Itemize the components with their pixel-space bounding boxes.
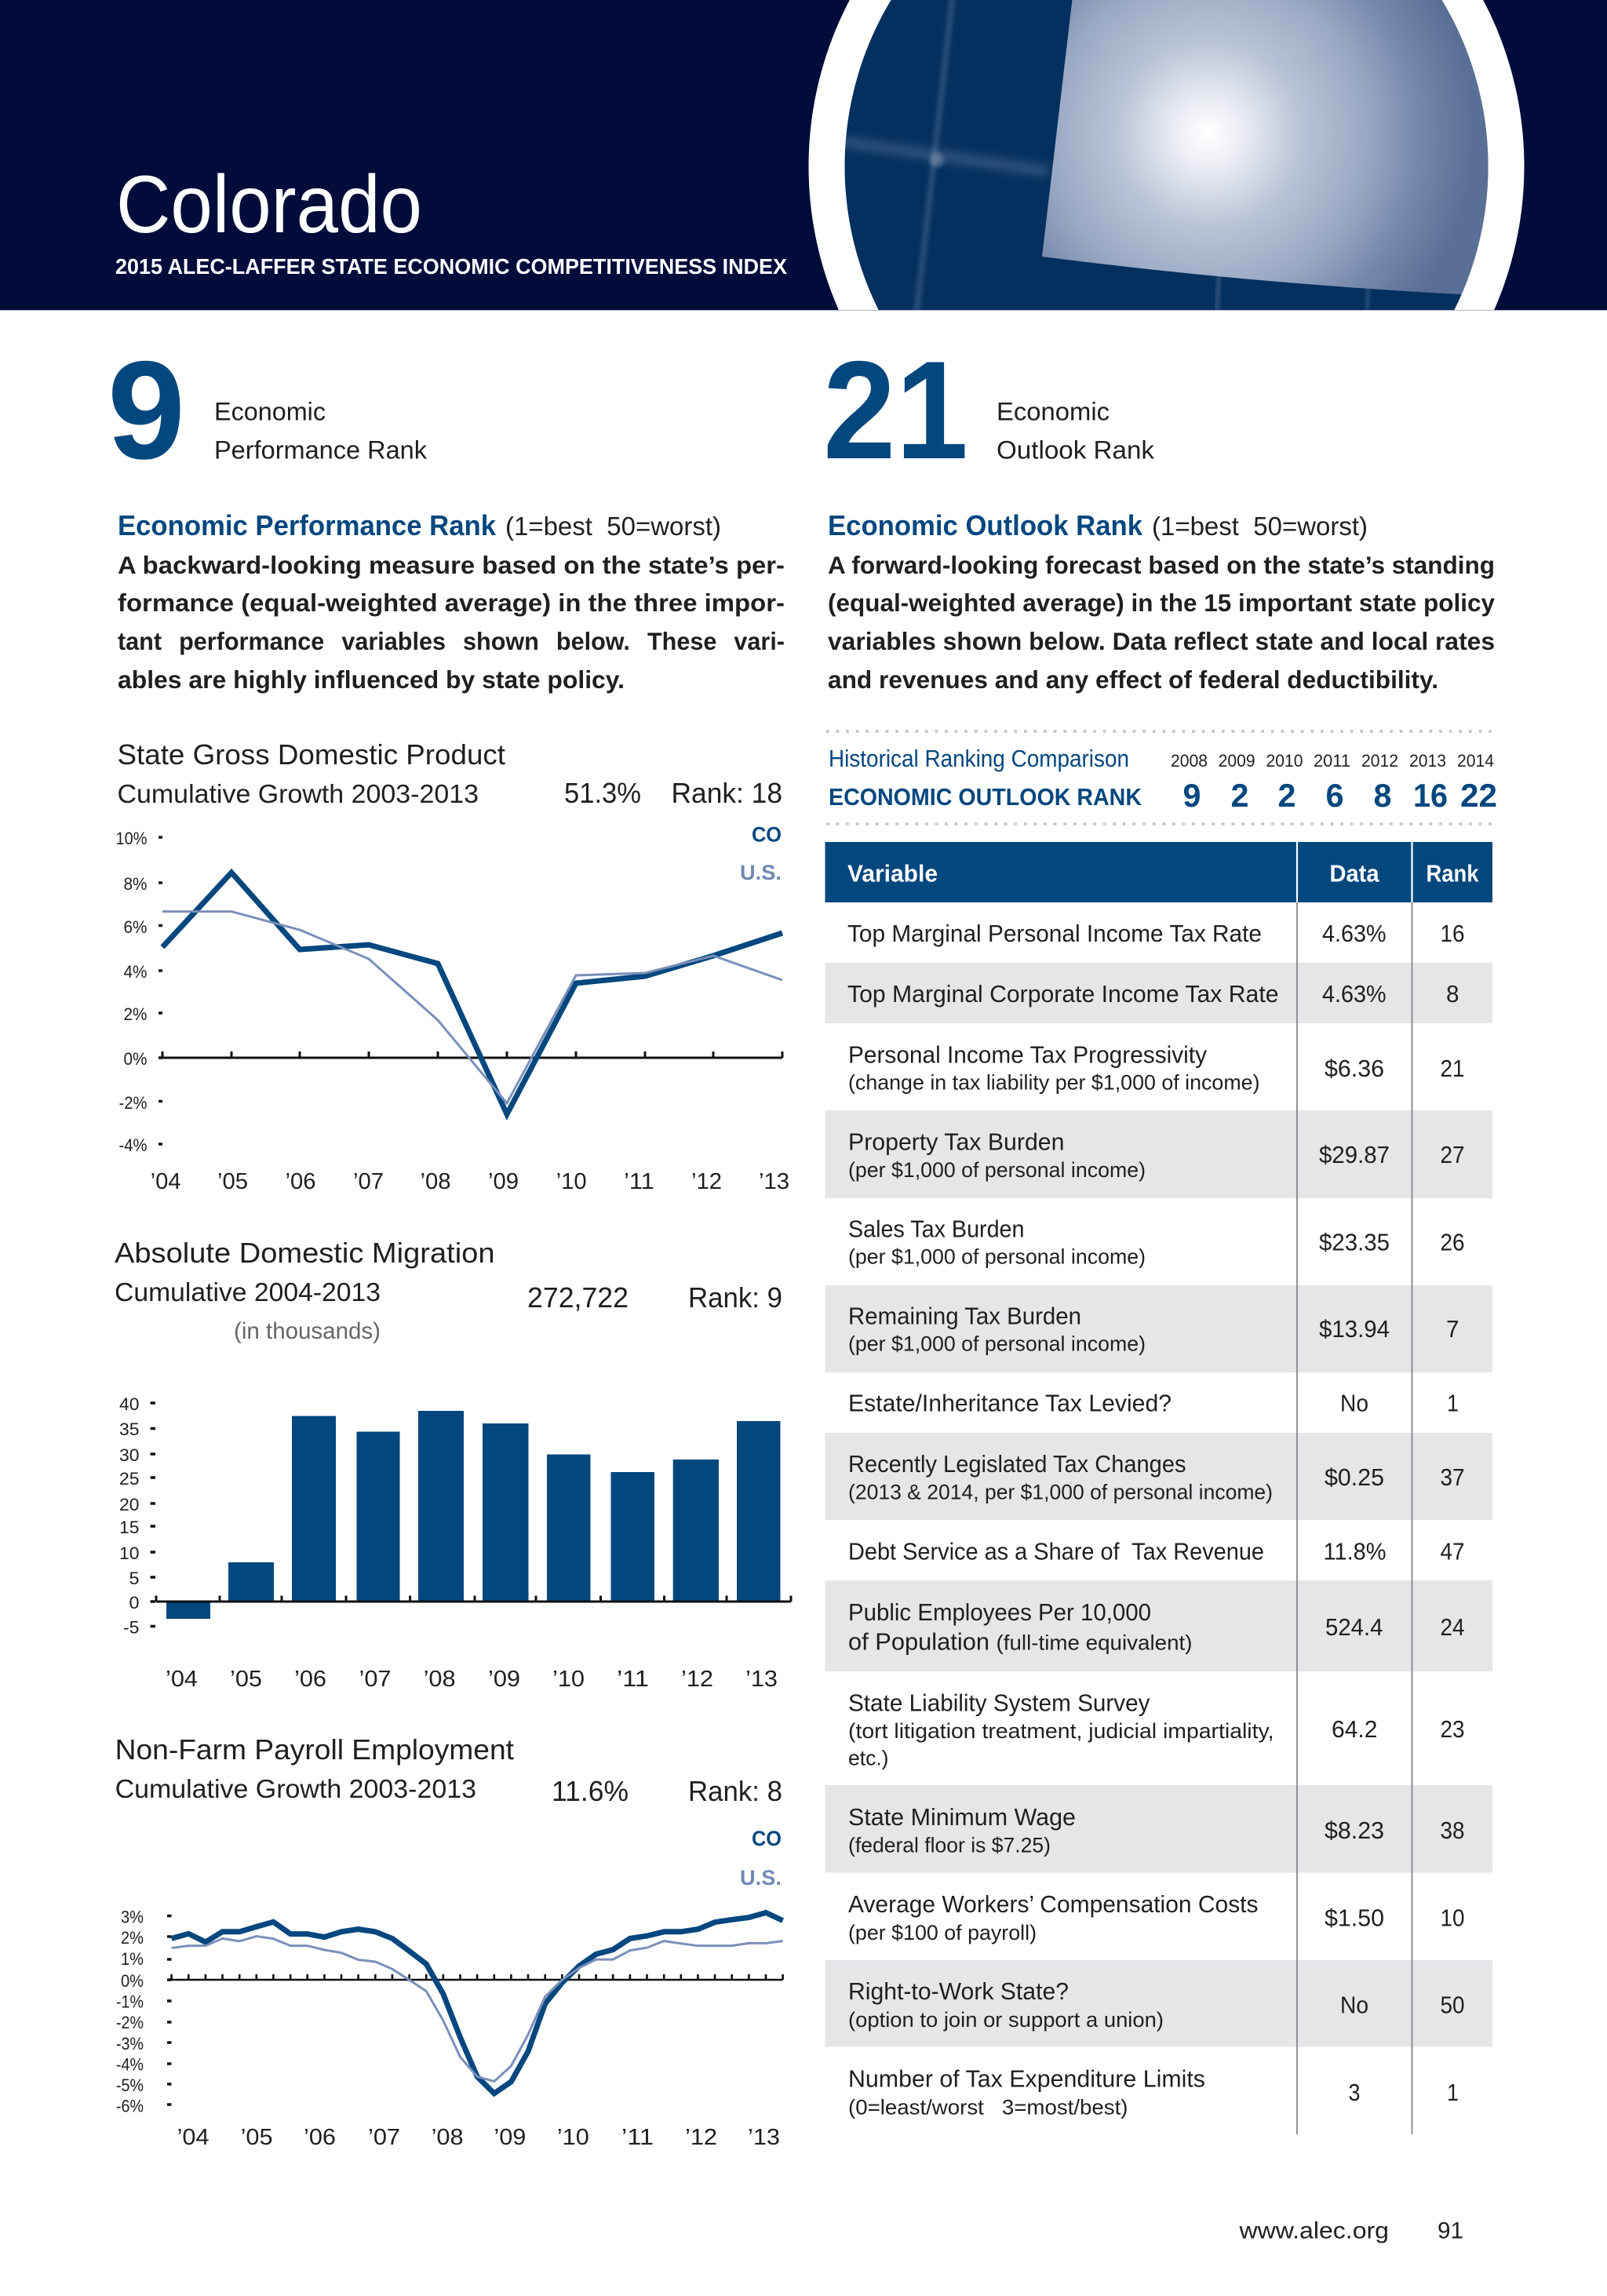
row: remaining tax burden (848, 1303, 1459, 1356)
row: right-to-work state: Right-to-Work State? (848, 1978, 1069, 2005)
year labels: 2009 (1219, 751, 1255, 771)
y axis: 1% (121, 1949, 144, 1969)
y axis: 15 (119, 1518, 140, 1537)
row: debt service: 11.8% (1323, 1538, 1386, 1565)
historical ranks: 2 (1277, 777, 1296, 814)
row: average workers' compensation costs: Average Workers’ Compensation Costs (848, 1891, 1259, 1918)
title: Colorado (116, 159, 422, 250)
US line (172, 1937, 783, 2081)
row: right-to-work state: No (1340, 1992, 1368, 2018)
chart heading: State Gross Domestic Product (118, 738, 505, 771)
x axis labels: ’12 (681, 1667, 713, 1692)
x axis labels: ’08 (432, 2125, 464, 2150)
row: remaining tax burden: $13.94 (1319, 1316, 1390, 1343)
x axis labels: ’12 (685, 2125, 717, 2150)
row: sales tax burden: $23.35 (1319, 1229, 1390, 1256)
x axis labels: ’05 (241, 2125, 273, 2150)
y axis: -2% (116, 2013, 144, 2032)
y axis: 20 (119, 1495, 140, 1514)
x axis labels (151, 1169, 789, 1194)
x axis labels: ’11 (621, 2125, 654, 2150)
row: state liability system survey: (tort litigation treatment, judicial impartiality, (848, 1719, 1274, 1743)
row: recently legislated tax changes (848, 1451, 1464, 1503)
y axis: 25 (119, 1469, 140, 1489)
x axis labels: ’08 (424, 1667, 456, 1692)
table: policy variables (825, 842, 1492, 2134)
x axis labels: ’09 (488, 1667, 520, 1692)
row: right-to-work state (848, 1978, 1464, 2032)
row: number of tax expenditure limits (848, 2065, 1459, 2119)
zero axis (156, 1596, 791, 1602)
legend: CO (752, 823, 782, 847)
header banner (0, 0, 1607, 311)
y axis: 40 (119, 1394, 140, 1414)
row: state minimum wage: 38 (1441, 1817, 1464, 1844)
row: state liability system survey: etc.) (848, 1747, 888, 1770)
y axis (116, 829, 162, 1155)
row: recently legislated tax changes: $0.25 (1325, 1464, 1384, 1491)
row: average workers' compensation costs: (per $100 of payroll) (848, 1921, 1037, 1944)
year labels: 2008 (1171, 751, 1208, 771)
row: top marginal personal income tax rate: Top Marginal Personal Income Tax Rate (847, 920, 1262, 947)
text block: outlook rank description: and revenues and any effect of federal deductibility. (828, 665, 1438, 694)
row: recently legislated tax changes: (2013 & 2014, per $1,000 of personal income) (848, 1480, 1273, 1503)
row: top marginal corporate income tax rate: 4.63% (1322, 981, 1386, 1008)
row: top marginal corporate income tax rate: Top Marginal Corporate Income Tax Rate (847, 981, 1279, 1008)
row: average workers' compensation costs: $1.50 (1325, 1905, 1384, 1932)
chart: state gross domestic product (116, 738, 789, 1194)
row: personal income tax progressivity (848, 1042, 1464, 1094)
row: estate/inheritance tax: No (1340, 1390, 1368, 1417)
chart heading: Rank: 18 (672, 777, 782, 809)
legend (740, 823, 782, 884)
chart heading: Absolute Domestic Migration (115, 1237, 494, 1269)
zero axis (162, 1051, 782, 1058)
x axis labels: ’04 (166, 1667, 198, 1692)
row: remaining tax burden: Remaining Tax Burden (848, 1303, 1081, 1329)
economic outlook rank badge: Outlook Rank (997, 436, 1155, 465)
row: recently legislated tax changes: Recently Legislated Tax Changes (848, 1451, 1186, 1478)
legend: CO (752, 1827, 782, 1850)
y axis: 10 (119, 1543, 140, 1563)
row: state minimum wage: State Minimum Wage (848, 1804, 1076, 1831)
y axis: -5 (123, 1618, 140, 1637)
x axis labels: ’10 (556, 1169, 587, 1194)
row: property tax burden: (per $1,000 of personal income) (848, 1158, 1146, 1182)
text block: performance rank description: formance (equal-weighted average) in the three impor- (118, 589, 785, 617)
historical ranks: 6 (1326, 777, 1343, 814)
x axis labels: ’08 (421, 1169, 450, 1194)
chart heading: 51.3% (564, 777, 641, 809)
row: top marginal personal income tax rate (847, 920, 1464, 947)
row: top marginal corporate income tax rate: 8 (1446, 981, 1459, 1008)
text block: outlook rank description: variables shown below. Data reflect state and local rates (828, 627, 1495, 655)
economic performance rank badge: Performance Rank (214, 436, 428, 465)
economic outlook rank badge (823, 332, 1155, 488)
legend (740, 1827, 782, 1890)
x axis labels: ’05 (230, 1667, 262, 1692)
row: sales tax burden: Sales Tax Burden (848, 1216, 1025, 1243)
historical ranks (1183, 777, 1497, 814)
historical ranks: 2 (1230, 777, 1249, 814)
US line (162, 912, 782, 1103)
historical ranks: 22 (1460, 777, 1497, 814)
state map emblem (808, 0, 1524, 310)
text block: performance rank description (118, 509, 785, 694)
row: sales tax burden: (per $1,000 of personal income) (848, 1245, 1146, 1268)
y axis: 2% (124, 1004, 148, 1024)
y axis: -2% (119, 1093, 148, 1113)
y axis: -4% (119, 1135, 148, 1155)
row: remaining tax burden: 7 (1446, 1316, 1459, 1343)
row: sales tax burden (848, 1216, 1464, 1268)
row: average workers' compensation costs (848, 1891, 1464, 1944)
economic performance rank badge (107, 332, 428, 488)
row: remaining tax burden: (per $1,000 of personal income) (848, 1332, 1146, 1356)
row: number of tax expenditure limits: 3 (1348, 2079, 1361, 2106)
chart heading (115, 1733, 782, 1807)
row: property tax burden: Property Tax Burden (848, 1128, 1064, 1155)
x axis labels: ’09 (494, 2125, 526, 2150)
x axis labels (166, 1667, 778, 1692)
y axis: 2% (121, 1928, 144, 1948)
y axis: 3% (121, 1907, 144, 1927)
row: top marginal personal income tax rate: 4.63% (1322, 920, 1386, 947)
chart heading: Rank: 9 (688, 1281, 782, 1314)
row: public employees: 524.4 (1325, 1614, 1383, 1641)
panel: historical ranking comparison: Historical Ranking Comparison (829, 745, 1129, 772)
row: personal income tax progressivity: 21 (1441, 1055, 1464, 1082)
x axis labels: ’11 (617, 1667, 649, 1692)
year labels: 2011 (1314, 751, 1350, 771)
year labels: 2012 (1361, 751, 1398, 771)
chart heading: 272,722 (527, 1281, 629, 1314)
row: estate/inheritance tax (848, 1390, 1459, 1417)
row: number of tax expenditure limits: 1 (1447, 2079, 1459, 2106)
row: estate/inheritance tax: Estate/Inheritance Tax Levied? (848, 1390, 1172, 1417)
row: property tax burden: $29.87 (1319, 1142, 1390, 1168)
row: state minimum wage (848, 1804, 1464, 1857)
text block: performance rank description: A backward-looking measure based on the state’s per- (118, 551, 785, 579)
y axis: 8% (124, 874, 148, 894)
economic performance rank badge: Economic (214, 397, 326, 425)
CO line (162, 873, 782, 1114)
row: average workers' compensation costs: 10 (1441, 1905, 1464, 1932)
y axis: 10% (116, 829, 148, 848)
row: property tax burden (848, 1128, 1464, 1182)
text block: outlook rank description: (equal-weighted average) in the 15 important state policy (828, 589, 1495, 617)
text block: outlook rank description: (1=best 50=worst) (1152, 512, 1368, 541)
row: right-to-work state: (option to join or support a union) (848, 2008, 1164, 2032)
x axis labels: ’06 (294, 1667, 326, 1692)
historical ranks: 8 (1373, 777, 1392, 814)
row: recently legislated tax changes: 37 (1441, 1464, 1464, 1491)
CO line (172, 1913, 783, 2094)
x axis labels: ’07 (368, 2125, 400, 2150)
x axis labels: ’07 (353, 1169, 384, 1194)
y axis: 5 (129, 1569, 140, 1588)
x axis labels: ’07 (359, 1667, 391, 1692)
chart heading: Cumulative 2004-2013 (115, 1277, 381, 1307)
chart: absolute domestic migration (115, 1237, 791, 1692)
row: number of tax expenditure limits: Number of Tax Expenditure Limits (848, 2065, 1205, 2092)
historical ranks: 9 (1183, 777, 1201, 814)
text block: outlook rank description: A forward-looking forecast based on the state’s standing (828, 551, 1495, 579)
row: debt service: Debt Service as a Share of Tax Revenue (848, 1538, 1264, 1565)
footer: 91 (1438, 2218, 1463, 2244)
x axis labels: ’09 (488, 1169, 519, 1194)
legend: U.S. (740, 1866, 782, 1890)
row: property tax burden: 27 (1441, 1142, 1464, 1168)
economic outlook rank badge: Economic (997, 397, 1110, 425)
table header: Variable (847, 860, 938, 887)
chart heading (115, 1237, 782, 1344)
economic outlook rank badge: 21 (823, 332, 968, 488)
bars (166, 1411, 780, 1619)
footer (1238, 2218, 1463, 2244)
y axis: 6% (124, 917, 148, 937)
y axis: -4% (116, 2054, 144, 2075)
panel: historical ranking comparison (826, 731, 1497, 824)
chart heading: Non-Farm Payroll Employment (115, 1733, 514, 1766)
y axis: -5% (116, 2076, 144, 2095)
x axis labels: ’06 (286, 1169, 315, 1194)
chart: non-farm payroll employment (115, 1733, 783, 2150)
chart heading: 11.6% (552, 1775, 629, 1807)
y axis (116, 1907, 171, 2116)
x axis labels (177, 2125, 780, 2150)
row: personal income tax progressivity: $6.36 (1325, 1055, 1384, 1082)
row stripes (825, 963, 1492, 2046)
text block: outlook rank description (828, 509, 1495, 694)
x axis labels: ’13 (748, 2125, 780, 2150)
footer: www.alec.org (1238, 2218, 1389, 2244)
panel: historical ranking comparison: ECONOMIC OUTLOOK RANK (829, 784, 1142, 811)
row: state minimum wage: $8.23 (1325, 1817, 1384, 1844)
row: state liability system survey (848, 1690, 1464, 1770)
table header: Data (1329, 860, 1379, 887)
row: personal income tax progressivity: (change in tax liability per $1,000 of income) (848, 1070, 1260, 1094)
row: sales tax burden: 26 (1441, 1229, 1464, 1256)
x axis labels: ’10 (557, 2125, 589, 2150)
y axis: -1% (116, 1992, 144, 2012)
text block: performance rank description: Economic Performance Rank (118, 509, 497, 541)
x axis labels: ’10 (552, 1667, 585, 1692)
chart heading: Cumulative Growth 2003-2013 (118, 779, 479, 808)
y axis: 0% (121, 1971, 144, 1991)
row: number of tax expenditure limits: (0=least/worst 3=most/best) (848, 2095, 1128, 2119)
row: state liability system survey: State Liability System Survey (848, 1690, 1150, 1717)
text block: outlook rank description: Economic Outlook Rank (828, 509, 1143, 541)
x axis labels: ’04 (177, 2125, 210, 2150)
table header (825, 842, 1492, 902)
row: public employees: Public Employees Per 10,000 (848, 1599, 1151, 1626)
table header: Rank (1427, 860, 1479, 887)
row: estate/inheritance tax: 1 (1447, 1390, 1459, 1417)
legend: U.S. (740, 861, 782, 884)
x axis labels: ’13 (759, 1169, 789, 1194)
y axis: -6% (116, 2097, 144, 2116)
row: public employees: 24 (1441, 1614, 1465, 1641)
x axis labels: ’11 (624, 1169, 654, 1194)
chart heading (118, 738, 782, 809)
y axis: 4% (124, 962, 148, 982)
row: debt service: 47 (1441, 1538, 1464, 1565)
chart heading: (in thousands) (234, 1318, 381, 1344)
x axis labels: ’05 (217, 1169, 248, 1194)
text block: performance rank description: ables are highly influenced by state policy. (118, 665, 625, 694)
row: right-to-work state: 50 (1441, 1992, 1464, 2018)
row: state minimum wage: (federal floor is $7.25) (848, 1833, 1051, 1857)
year labels: 2010 (1266, 751, 1303, 771)
y axis: -3% (116, 2034, 144, 2054)
row: public employees (848, 1599, 1465, 1656)
chart heading: Rank: 8 (688, 1775, 782, 1807)
y axis: 0% (124, 1049, 148, 1069)
year labels: 2014 (1457, 751, 1494, 771)
chart heading: Cumulative Growth 2003-2013 (115, 1774, 476, 1803)
row: public employees: of Population (848, 1629, 989, 1656)
zero axis (172, 1974, 783, 1980)
text block: performance rank description: (1=best 50=worst) (505, 512, 721, 541)
row: state liability system survey: 64.2 (1332, 1716, 1378, 1743)
x axis labels: ’12 (691, 1169, 722, 1194)
y axis: 0 (129, 1593, 140, 1613)
year labels: 2013 (1409, 751, 1446, 771)
text block: performance rank description: tant performance variables shown below. These vari- (118, 627, 785, 655)
y axis: 35 (119, 1420, 140, 1439)
x axis labels: ’06 (304, 2125, 336, 2150)
y axis (119, 1394, 155, 1637)
historical ranks: 16 (1413, 777, 1448, 814)
x axis labels: ’04 (151, 1169, 181, 1194)
row: personal income tax progressivity: Personal Income Tax Progressivity (848, 1042, 1208, 1069)
economic performance rank badge: 9 (107, 332, 185, 488)
x axis labels: ’13 (745, 1667, 778, 1692)
row: public employees: (full-time equivalent) (997, 1631, 1193, 1654)
row: top marginal personal income tax rate: 16 (1441, 920, 1464, 947)
subtitle: 2015 ALEC-LAFFER STATE ECONOMIC COMPETITIVENESS INDEX (115, 254, 787, 279)
y axis: 30 (119, 1445, 140, 1465)
year labels (1171, 751, 1494, 771)
row: state liability system survey: 23 (1441, 1716, 1464, 1743)
